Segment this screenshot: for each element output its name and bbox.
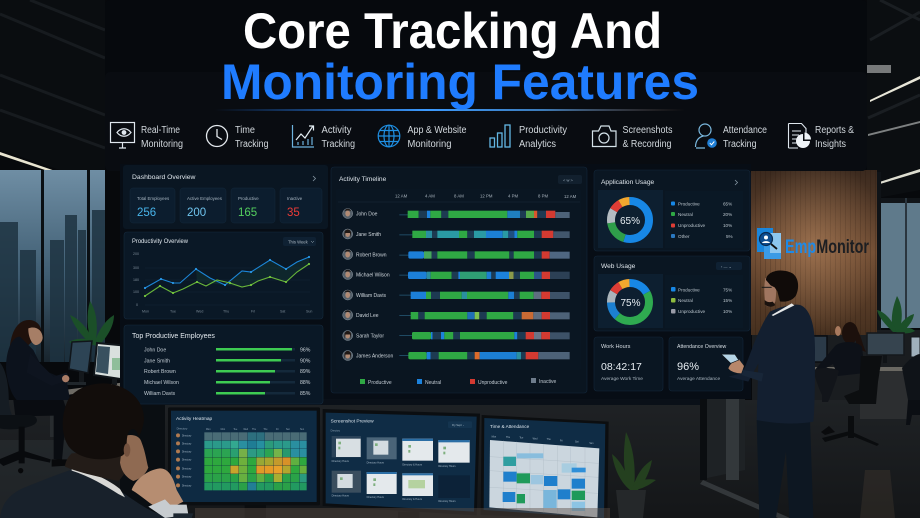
line chart: Wed	[196, 310, 203, 314]
screenshot thumbnails: Directory Hours	[438, 465, 456, 468]
time axis: 12 AM	[395, 194, 408, 198]
employee names	[356, 212, 393, 360]
time axis: 4 PM	[508, 194, 518, 198]
monitor: time and attendance: Tue	[519, 438, 524, 440]
employee bars: 89%	[300, 369, 311, 375]
panel: activity timeline	[331, 167, 587, 393]
employee names: Michael Wilson	[356, 272, 390, 278]
monitor: time and attendance: Sat	[575, 441, 579, 444]
screenshot thumbnails: Directory & Hours	[402, 498, 423, 501]
panel: attendance overview: 96%	[677, 361, 699, 373]
monitor: activity heatmap: Wed	[243, 429, 249, 431]
legend: app usage: 65%	[723, 202, 732, 206]
panel: productivity overview: This Week	[288, 240, 309, 244]
monitor: screenshot preview: Directory	[331, 429, 341, 432]
line chart: 100	[133, 290, 139, 294]
time axis: 4 AM	[425, 194, 435, 198]
monitor: screenshot preview: Screenshot Preview	[331, 418, 374, 424]
EmpMonitor logo	[757, 228, 869, 259]
employee bars: 85%	[300, 391, 311, 397]
feature: time tracking	[206, 125, 268, 150]
screenshot thumbnails: Directory Hours	[367, 462, 385, 465]
monitor: time and attendance: Thu	[547, 439, 551, 441]
panel: dashboard overview	[123, 165, 328, 229]
donut: app usage 65%	[611, 201, 649, 239]
stat: inactive	[280, 188, 322, 223]
monitor: activity heatmap: Tue	[233, 429, 238, 431]
employee bars	[216, 348, 311, 397]
monitor: activity heatmap: Thu	[263, 429, 268, 431]
feature: activity tracking: Tracking	[322, 139, 355, 150]
line chart: Thu	[223, 310, 229, 314]
stat: productive: Productive	[238, 196, 259, 201]
panel: web usage: Web Usage	[601, 263, 636, 270]
monitor: time and attendance: Wed	[533, 438, 538, 440]
line chart: 0	[136, 303, 138, 307]
feature: screenshots and recording: Screenshots	[622, 125, 672, 136]
desk plant foreground	[612, 432, 656, 518]
feature: real-time monitoring: Monitoring	[141, 139, 183, 150]
stat: total employees	[130, 188, 175, 223]
panel: web usage: ‹ — ⌄	[721, 264, 732, 269]
panel: attendance overview: Attendance Overview	[677, 344, 727, 350]
panel: web usage: 75%	[620, 298, 641, 309]
monitor: time and attendance: Time & Attendance	[490, 424, 530, 429]
stat: total employees: 256	[137, 207, 156, 219]
panel: attendance overview: Average Attendance	[677, 376, 720, 382]
monitor: time and attendance	[481, 415, 609, 518]
left plant	[69, 301, 114, 347]
legend: web usage	[671, 287, 732, 314]
legend: web usage: 75%	[723, 288, 732, 292]
row: John Doe	[408, 211, 570, 218]
feature navigation	[110, 122, 854, 150]
employee bars: 90%	[300, 358, 311, 364]
foreground seated man	[0, 383, 193, 518]
time axis: 8 PM	[538, 194, 548, 198]
line chart: Sat	[280, 310, 285, 314]
monitor: activity heatmap	[168, 407, 320, 518]
time axis	[395, 194, 577, 199]
panel: top productive employees	[124, 325, 323, 404]
right far person	[902, 354, 920, 400]
panel: activity timeline: < w >	[563, 178, 573, 182]
timeline legend: Neutral	[425, 380, 441, 386]
time axis: 8 AM	[454, 194, 464, 198]
employee names: William Davis	[356, 293, 386, 299]
panel: application usage	[594, 170, 750, 251]
employee names: Sarah Taylor	[356, 334, 384, 340]
right desk	[806, 367, 920, 371]
timeline bars	[399, 211, 570, 359]
monitor: screenshot preview	[323, 409, 480, 518]
screenshot thumbnails: Directory & Hours	[402, 463, 423, 466]
heatmap avatars: Directory	[182, 459, 192, 462]
stat: productive: 165	[238, 207, 257, 219]
panel: top productive employees: Michael Wilson	[144, 380, 179, 386]
monitor: activity heatmap: Mon	[206, 429, 211, 431]
panel: attendance overview	[669, 337, 743, 391]
feature: activity tracking: Activity	[322, 125, 352, 136]
panel: top productive employees: William Davis	[144, 391, 176, 397]
heatmap avatars: Directory	[182, 434, 192, 437]
seated woman left	[6, 320, 72, 467]
panel: top productive employees: Robert Brown	[144, 369, 176, 375]
feature: app and website monitoring	[378, 125, 467, 150]
stat: active employees	[180, 188, 226, 223]
stat: total employees: Total Employees	[137, 196, 170, 201]
monitor: activity heatmap: Sun	[300, 429, 305, 431]
employee avatars	[343, 208, 353, 360]
monitor: time and attendance: Thu	[506, 437, 511, 439]
stat: active employees: 200	[187, 207, 206, 219]
legend: app usage: Productive	[678, 202, 700, 206]
time axis: 12 AM	[564, 194, 577, 199]
panel: web usage	[594, 256, 750, 331]
feature: reports and insights: Reports &	[815, 125, 854, 136]
left monitors	[64, 341, 130, 385]
title	[221, 3, 699, 110]
feature: screenshots and recording: & Recording	[622, 139, 672, 150]
stat: active employees: Active Employees	[187, 196, 223, 201]
line chart: 200	[133, 252, 139, 256]
monitor: time and attendance: Fri	[560, 439, 563, 442]
feature: attendance tracking: Attendance	[723, 125, 767, 136]
stat: inactive: 35	[287, 207, 300, 219]
feature: attendance tracking: Tracking	[723, 139, 756, 150]
line chart: Fri	[251, 310, 255, 314]
left office chair	[0, 362, 51, 473]
feature: productivity analytics	[490, 125, 567, 150]
timeline legend	[360, 378, 556, 386]
standing man	[721, 271, 815, 518]
legend: app usage: Neutral	[678, 212, 693, 217]
title: Core Tracking And	[243, 3, 662, 59]
employee names: John Doe	[356, 212, 378, 218]
seated woman right	[813, 322, 866, 435]
row: Michael Wilson	[408, 272, 570, 279]
title: Monitoring Features	[221, 54, 699, 110]
row: James Anderson	[408, 352, 570, 359]
row: William Davis	[411, 292, 570, 299]
timeline legend: Productive	[368, 380, 392, 386]
glowing accent line	[215, 109, 685, 111]
feature: app and website monitoring: Monitoring	[408, 139, 452, 150]
feature: time tracking: Time	[235, 125, 255, 136]
employee names: David Lee	[356, 313, 379, 319]
legend: web usage: Neutral	[678, 298, 693, 303]
panel: top productive employees: Jane Smith	[144, 358, 170, 364]
screenshot thumbnails: Directory Hours	[332, 460, 350, 463]
screenshot thumbnails: Directory Hours	[438, 500, 456, 503]
panel: top productive employees: John Doe	[144, 348, 166, 354]
employee names: Jane Smith	[356, 232, 381, 238]
screenshot thumbnails: Directory Hours	[367, 496, 385, 499]
legend: web usage: Unproductive	[678, 309, 706, 314]
right chair	[844, 356, 882, 404]
timeline legend: Unproductive	[478, 380, 508, 386]
legend: app usage: 20%	[723, 212, 732, 217]
line chart: Sun	[306, 310, 312, 314]
screenshot thumbnails	[332, 436, 470, 503]
legend: web usage: Productive	[678, 288, 700, 292]
heatmap avatars: Directory	[182, 467, 192, 470]
heatmap avatars: Directory	[182, 450, 192, 453]
top backdrop panel	[105, 0, 867, 171]
feature: activity tracking	[292, 125, 355, 150]
panel: dashboard overview: Dashboard Overview	[132, 174, 196, 181]
monitor: activity heatmap: Directory	[177, 426, 188, 430]
panel: work hours: Work Hours	[601, 344, 631, 350]
employee names: Robert Brown	[356, 252, 387, 258]
row: Robert Brown	[408, 251, 570, 259]
heatmap avatars: Directory	[182, 484, 192, 487]
heatmap avatars	[176, 433, 192, 487]
line chart: Tue	[170, 310, 176, 314]
panel: application usage: Application Usage	[601, 179, 654, 186]
right plant	[877, 296, 915, 334]
feature: real-time monitoring: Real-Time	[141, 125, 180, 136]
line chart: 300	[133, 266, 139, 270]
time axis: 12 PM	[480, 194, 493, 198]
heatmap avatars: Directory	[182, 442, 192, 445]
stat: productive	[231, 188, 275, 223]
panel: work hours: 08:42:17	[601, 361, 642, 373]
panel: productivity overview	[124, 232, 323, 319]
legend: app usage: Unproductive	[678, 223, 706, 228]
donut: web usage 75%	[611, 283, 649, 321]
monitor: time and attendance: Sun	[589, 443, 594, 445]
panel: activity timeline: Activity Timeline	[339, 176, 387, 183]
stat: inactive: Inactive	[287, 196, 303, 201]
row: David Lee	[411, 312, 570, 319]
line chart	[133, 252, 312, 314]
feature: time tracking: Tracking	[235, 139, 268, 150]
wood wall with logo	[751, 170, 877, 335]
legend: web usage: 15%	[723, 298, 732, 303]
panel: work hours: Average Work Time	[601, 376, 643, 382]
background plant and desks	[40, 296, 920, 446]
panel: productivity overview: Productivity Overview	[132, 238, 188, 245]
monitor: screenshot preview: Fly Sept ⌄	[452, 423, 465, 427]
feature: reports and insights: Insights	[815, 139, 846, 150]
line chart: 180	[133, 278, 139, 282]
legend: app usage	[671, 202, 733, 239]
feature: productivity analytics: Productivity	[519, 125, 567, 136]
desk surface foreground	[195, 508, 610, 518]
feature: screenshots and recording	[592, 125, 672, 150]
panel: work hours	[594, 337, 663, 391]
legend: app usage: 5%	[726, 234, 733, 239]
main dashboard screen	[120, 164, 751, 405]
feature: attendance tracking	[696, 124, 767, 150]
calendar	[489, 440, 599, 517]
employee bars: 88%	[300, 380, 311, 386]
screenshot thumbnails: Directory Hours	[332, 494, 350, 497]
monitor: activity heatmap: Thu	[252, 429, 257, 431]
monitor: time and attendance: Mon	[492, 436, 497, 438]
left desk	[40, 381, 135, 398]
legend: app usage: 10%	[723, 223, 732, 228]
timeline legend: Inactive	[539, 379, 556, 385]
row: Sarah Taylor	[412, 332, 570, 339]
legend: app usage: Other	[678, 234, 690, 239]
monitor: activity heatmap: Mon	[221, 429, 226, 431]
employee names: James Anderson	[356, 354, 393, 360]
heatmap avatars: Directory	[182, 476, 192, 479]
monitor: activity heatmap: Fri	[276, 428, 279, 431]
legend: web usage: 10%	[723, 309, 732, 314]
line chart: Mon	[142, 310, 149, 314]
panel: top productive employees: Top Productive Employees	[132, 333, 215, 340]
heatmap grid	[204, 432, 307, 490]
monitor: activity heatmap: Sat	[286, 428, 290, 431]
right monitors	[811, 336, 827, 362]
EmpMonitor logo: EmpMonitor	[785, 237, 869, 258]
panel: application usage: 65%	[620, 216, 640, 227]
feature: app and website monitoring: App & Website	[408, 125, 467, 136]
feature: productivity analytics: Analytics	[519, 139, 556, 150]
feature: real-time monitoring	[110, 122, 183, 150]
row: Jane Smith	[412, 231, 570, 238]
employee bars: 96%	[300, 348, 311, 354]
monitor: activity heatmap: Activity Heatmap	[176, 416, 213, 422]
feature: reports and insights	[788, 124, 854, 150]
